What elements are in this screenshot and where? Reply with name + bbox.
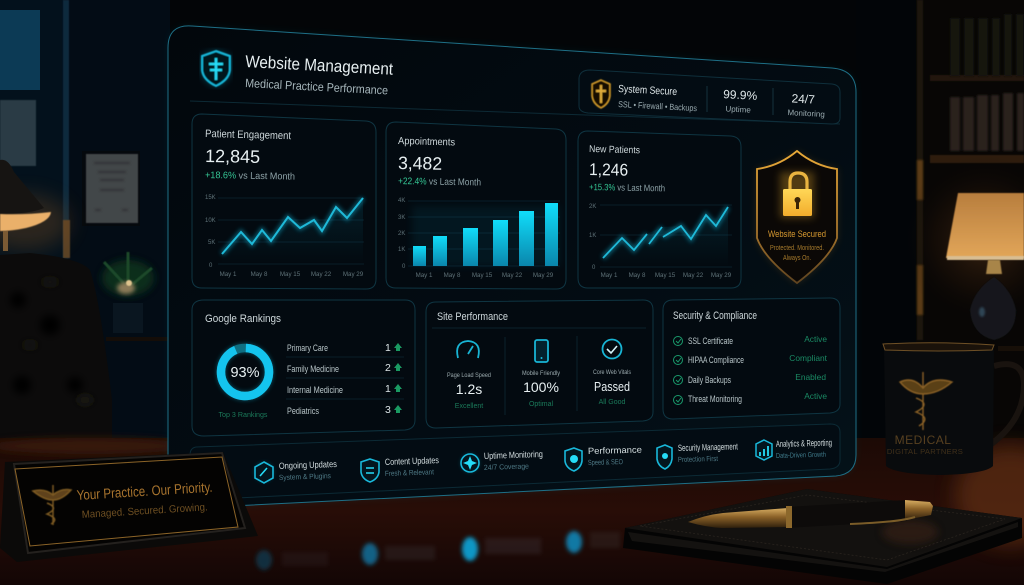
line chart: new patients: 1K — [589, 233, 596, 239]
panel: patient engagement: +18.6% vs Last Month — [205, 170, 295, 183]
desk lamp left — [0, 160, 70, 251]
metric: mobile friendly: 100% — [523, 379, 559, 395]
line chart: new patients: May 8 — [629, 272, 646, 279]
rankings list: 3 — [385, 404, 391, 416]
line chart: patient engagement: May 15 — [280, 271, 301, 278]
bar chart: appointments: 4K — [398, 198, 405, 204]
icon: padlock — [780, 172, 814, 218]
bar chart: appointments: May 22 — [502, 272, 523, 279]
panel: security and compliance: Security & Compliance — [673, 310, 757, 322]
service: analytics and reporting: Data-Driven Growth — [776, 450, 826, 460]
line chart: new patients: May 15 — [655, 272, 676, 279]
bar chart: appointments: May 15 — [472, 272, 493, 279]
service: security management: Protection First — [678, 454, 718, 464]
glass dashboard panel — [168, 26, 856, 508]
panel: new patients — [578, 131, 741, 288]
metric: page load speed — [447, 341, 491, 410]
donut chart: 93%: 93% — [230, 365, 260, 381]
metric: page load speed: Excellent — [455, 403, 483, 410]
line chart: patient engagement: 0 — [209, 263, 213, 269]
service: security management: Security Management — [678, 441, 738, 453]
service: uptime monitoring: Uptime Monitoring — [484, 449, 543, 461]
line chart: new patients: May 1 — [601, 272, 618, 279]
metric: core web vitals: Passed — [594, 380, 630, 394]
metric: mobile friendly — [522, 340, 561, 408]
icon: gold shield — [592, 80, 610, 108]
panel: patient engagement: Patient Engagement — [205, 128, 291, 142]
rankings list: 2 — [385, 362, 391, 374]
panel: site performance: Site Performance — [437, 311, 508, 323]
line chart: new patients: 2K — [589, 204, 596, 210]
bar chart: appointments: 2K — [398, 231, 405, 237]
service: content updates: Content Updates — [385, 455, 439, 467]
panel: services strip — [190, 424, 840, 500]
monitoring stat: 24/7 — [791, 91, 816, 107]
gold pen — [688, 500, 933, 528]
service: ongoing updates: System & Plugins — [279, 471, 331, 482]
line chart: patient engagement: 10K — [205, 218, 216, 224]
desk nameplate: Your Practice. Our Priority. — [76, 479, 213, 503]
metric: page load speed: 1.2s — [456, 381, 482, 397]
rankings list: 1 — [385, 383, 391, 395]
metric: core web vitals — [593, 340, 632, 406]
compliance list: Enabled — [795, 372, 826, 382]
panel reflection on desk — [256, 531, 620, 570]
metric: mobile friendly: Mobile Friendly — [522, 370, 561, 377]
panel: patient engagement: 12,845 — [205, 146, 260, 167]
panel: site performance — [426, 300, 653, 428]
badge: website secured shield: Protected. Monitored. — [770, 243, 824, 252]
panel: appointments: +22.4% vs Last Month — [398, 176, 481, 188]
rankings list — [286, 342, 404, 416]
panel: new patients: 1,246 — [589, 160, 628, 180]
panel: new patients: +15.3% vs Last Month — [589, 182, 665, 193]
service: content updates: Fresh & Relevant — [385, 467, 434, 478]
badge: website secured shield: Always On. — [783, 253, 811, 262]
bar chart: appointments: 0 — [402, 264, 406, 270]
leather notebook — [623, 489, 1022, 584]
service: uptime monitoring: 24/7 Coverage — [484, 461, 529, 472]
rankings list: Primary Care — [287, 343, 328, 353]
coffee mug: MEDICAL — [895, 433, 951, 447]
coffee mug: DIGITAL PARTNERS — [887, 447, 963, 456]
line chart: patient engagement: 5K — [208, 240, 215, 246]
service: performance: Speed & SEO — [588, 457, 623, 467]
compliance list: Active — [804, 334, 827, 344]
line chart: patient engagement: 15K — [205, 195, 216, 201]
monitoring stat: Monitoring — [787, 108, 825, 119]
coffee mug — [883, 343, 1024, 475]
line chart: new patients: 0 — [592, 265, 596, 271]
line chart: new patients: May 29 — [711, 272, 732, 279]
service: ongoing updates — [254, 459, 337, 483]
panel: appointments: Appointments — [398, 136, 455, 148]
metric: core web vitals: All Good — [599, 399, 626, 406]
rankings list: 1 — [385, 342, 391, 354]
line chart: new patients — [589, 204, 732, 279]
line chart: patient engagement: May 22 — [311, 271, 332, 278]
line chart: patient engagement: May 29 — [343, 271, 364, 278]
line chart: new patients: May 22 — [683, 272, 704, 279]
panel: google rankings: Top 3 Rankings — [218, 410, 268, 419]
compliance list: HIPAA Compliance — [688, 355, 744, 365]
metric: core web vitals: Core Web Vitals — [593, 369, 632, 376]
desk nameplate: Managed. Secured. Growing. — [81, 501, 208, 521]
wall framed certificates left — [0, 100, 140, 226]
bar chart: appointments — [398, 198, 560, 279]
panel: google rankings: Google Rankings — [205, 313, 281, 325]
title: Website Management — [245, 52, 394, 79]
uptime stat — [723, 87, 758, 115]
wooden desk — [0, 438, 1024, 585]
service: content updates — [361, 455, 439, 482]
uptime stat: 99.9% — [723, 87, 758, 103]
bar chart: appointments: May 29 — [533, 272, 554, 279]
service: performance — [565, 445, 642, 471]
system secure text: SSL • Firewall • Backups — [618, 99, 697, 113]
metric: page load speed: Page Load Speed — [447, 372, 491, 379]
compliance list — [674, 334, 828, 404]
service: ongoing updates: Ongoing Updates — [279, 459, 337, 471]
table lamp right — [900, 155, 1024, 351]
service: analytics and reporting — [756, 438, 832, 460]
service: security management — [657, 441, 738, 469]
panel: patient engagement — [192, 114, 376, 289]
status bar — [579, 70, 840, 124]
rankings list: Pediatrics — [287, 406, 319, 416]
uptime stat: Uptime — [725, 104, 752, 115]
line chart: patient engagement — [205, 195, 364, 278]
compliance list: Threat Monitoring — [688, 394, 742, 404]
icon: caduceus — [33, 485, 71, 525]
bookshelf right — [930, 14, 1024, 163]
compliance list: Active — [804, 391, 827, 401]
compliance list: Daily Backups — [688, 375, 731, 385]
leather chair — [0, 253, 112, 442]
panel: appointments: 3,482 — [398, 153, 442, 174]
badge: website secured shield: Website Secured — [768, 228, 826, 239]
bar chart: appointments: May 8 — [444, 272, 461, 279]
system secure text: System Secure — [618, 83, 678, 98]
metric: mobile friendly: Optimal — [529, 401, 553, 408]
panel: new patients: New Patients — [589, 144, 640, 156]
monitoring stat — [787, 91, 825, 119]
panel: security and compliance — [663, 298, 840, 419]
service: uptime monitoring — [461, 449, 543, 472]
rankings list: Family Medicine — [287, 364, 339, 374]
panel: appointments — [386, 122, 566, 289]
line chart: patient engagement: May 1 — [220, 271, 237, 278]
bar chart: appointments: 1K — [398, 247, 405, 253]
service: performance: Performance — [588, 445, 642, 456]
system secure text — [618, 83, 697, 113]
rankings list: Internal Medicine — [287, 385, 343, 395]
icon: mug caduceus — [900, 372, 952, 430]
bar chart: appointments: May 1 — [416, 272, 433, 279]
header: shield logo — [202, 51, 230, 86]
compliance list: Compliant — [789, 353, 828, 363]
service: analytics and reporting: Analytics & Reporting — [776, 438, 832, 449]
plant — [102, 252, 168, 341]
panel: google rankings — [192, 300, 415, 436]
line chart: patient engagement: May 8 — [251, 271, 268, 278]
compliance list: SSL Certificate — [688, 336, 733, 346]
bar chart: appointments: 3K — [398, 215, 405, 221]
desk nameplate — [0, 452, 258, 562]
subtitle: Medical Practice Performance — [245, 76, 389, 97]
badge: website secured shield — [757, 151, 837, 283]
donut chart: 93% — [220, 347, 270, 397]
